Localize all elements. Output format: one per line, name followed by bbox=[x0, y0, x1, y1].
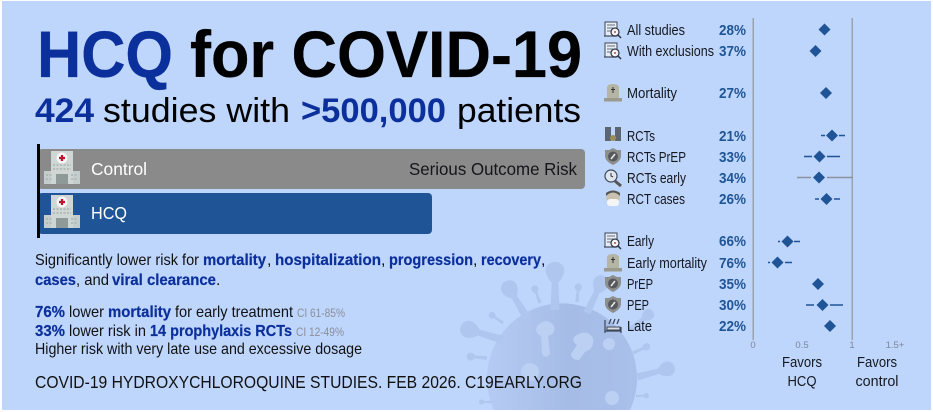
row: PrEP: PrEP bbox=[627, 276, 653, 293]
row: Mortality bbox=[604, 84, 832, 102]
summary text: , bbox=[381, 252, 385, 269]
row: Early mortality: 76% bbox=[719, 255, 746, 272]
bar: control: Control bbox=[91, 159, 147, 179]
row: RCT cases: RCT cases bbox=[627, 191, 685, 208]
row: Mortality: Mortality bbox=[627, 85, 677, 102]
summary text: Significantly lower risk for bbox=[35, 252, 200, 269]
key findings: for early treatment bbox=[175, 304, 294, 321]
row: With exclusions: 37% bbox=[719, 43, 746, 60]
row: RCT cases bbox=[606, 190, 840, 208]
row: RCTs PrEP bbox=[605, 148, 840, 166]
key findings: CI 12-49% bbox=[296, 327, 344, 339]
summary text bbox=[35, 252, 545, 289]
row: RCTs PrEP: 33% bbox=[719, 149, 746, 166]
risk bars bbox=[37, 144, 585, 238]
subtitle bbox=[35, 92, 581, 130]
row: Late: Late bbox=[627, 318, 652, 335]
bar: HCQ: HCQ bbox=[91, 203, 127, 223]
row: Early bbox=[604, 233, 800, 250]
row: With exclusions: With exclusions bbox=[627, 43, 714, 60]
key findings: Higher risk with very late use and excessive dosage bbox=[35, 341, 362, 358]
axis ticks: 1.5+ bbox=[886, 340, 905, 351]
row: All studies: 28% bbox=[719, 22, 746, 39]
summary text: viral clearance bbox=[112, 272, 216, 289]
summary text: , bbox=[541, 252, 545, 269]
summary text: hospitalization bbox=[275, 252, 381, 269]
row: RCTs early: RCTs early bbox=[627, 170, 686, 187]
key findings bbox=[35, 304, 362, 358]
summary text: , bbox=[267, 252, 271, 269]
bar: HCQ bbox=[38, 193, 432, 234]
summary text: progression bbox=[389, 252, 473, 269]
subtitle: patients bbox=[457, 92, 581, 130]
key findings: 76% bbox=[35, 304, 65, 321]
key findings: 14 prophylaxis RCTs bbox=[150, 323, 292, 340]
axis lines bbox=[752, 18, 853, 340]
row: RCTs PrEP: RCTs PrEP bbox=[627, 149, 686, 166]
row: All studies: All studies bbox=[627, 22, 685, 39]
summary text: , bbox=[473, 252, 477, 269]
baseline bbox=[37, 144, 40, 238]
key findings: lower risk in bbox=[69, 323, 146, 340]
row: RCTs early bbox=[605, 170, 853, 187]
row: RCTs early: 34% bbox=[719, 170, 746, 187]
key findings: mortality bbox=[108, 304, 171, 321]
row: All studies bbox=[604, 22, 830, 39]
summary text: mortality bbox=[203, 252, 266, 269]
row: Late: 22% bbox=[719, 318, 746, 335]
favors labels: control bbox=[856, 373, 898, 390]
virus illustration bbox=[458, 262, 676, 410]
axis ticks: 0.5 bbox=[795, 340, 809, 351]
row: With exclusions bbox=[604, 43, 822, 60]
favors labels: Favors bbox=[782, 354, 822, 371]
footer: COVID-19 HYDROXYCHLOROQUINE STUDIES. FEB 2026. C19EARLY.ORG bbox=[35, 372, 582, 392]
row: PrEP bbox=[605, 275, 824, 293]
row: Early mortality bbox=[604, 254, 792, 272]
row: Early: 66% bbox=[719, 233, 746, 250]
favors labels: HCQ bbox=[788, 373, 816, 390]
key findings: CI 61-85% bbox=[297, 308, 345, 320]
row: PrEP: 35% bbox=[719, 276, 746, 293]
axis ticks bbox=[750, 340, 905, 351]
summary text: . bbox=[216, 272, 220, 289]
row: Mortality: 27% bbox=[719, 85, 746, 102]
favors labels: Favors bbox=[857, 354, 897, 371]
forest plot bbox=[604, 18, 905, 390]
row: RCT cases: 26% bbox=[719, 191, 746, 208]
subtitle: >500,000 bbox=[301, 92, 446, 130]
summary text: , and bbox=[76, 272, 109, 289]
favors labels bbox=[782, 354, 898, 390]
row: RCTs: 21% bbox=[719, 128, 746, 145]
key findings: lower bbox=[69, 304, 105, 321]
key findings: 33% bbox=[35, 323, 65, 340]
row: PEP: PEP bbox=[627, 297, 649, 314]
row: PEP: 30% bbox=[719, 297, 746, 314]
subtitle: studies with bbox=[103, 92, 290, 130]
row: Late bbox=[605, 318, 836, 335]
row: PEP bbox=[605, 296, 843, 314]
row: RCTs: RCTs bbox=[627, 128, 655, 145]
title: for COVID-19 bbox=[190, 17, 582, 91]
row: Early: Early bbox=[627, 233, 654, 250]
bar: control: Serious Outcome Risk bbox=[409, 159, 577, 179]
summary text: cases bbox=[35, 272, 76, 289]
row: Early mortality: Early mortality bbox=[627, 255, 707, 272]
row: RCTs bbox=[605, 127, 845, 145]
title bbox=[37, 17, 582, 91]
summary text: recovery bbox=[481, 252, 541, 269]
bar: control bbox=[38, 149, 585, 189]
axis ticks: 0 bbox=[750, 340, 756, 351]
axis ticks: 1 bbox=[849, 340, 855, 351]
title: HCQ bbox=[37, 17, 173, 91]
subtitle: 424 bbox=[35, 92, 94, 130]
